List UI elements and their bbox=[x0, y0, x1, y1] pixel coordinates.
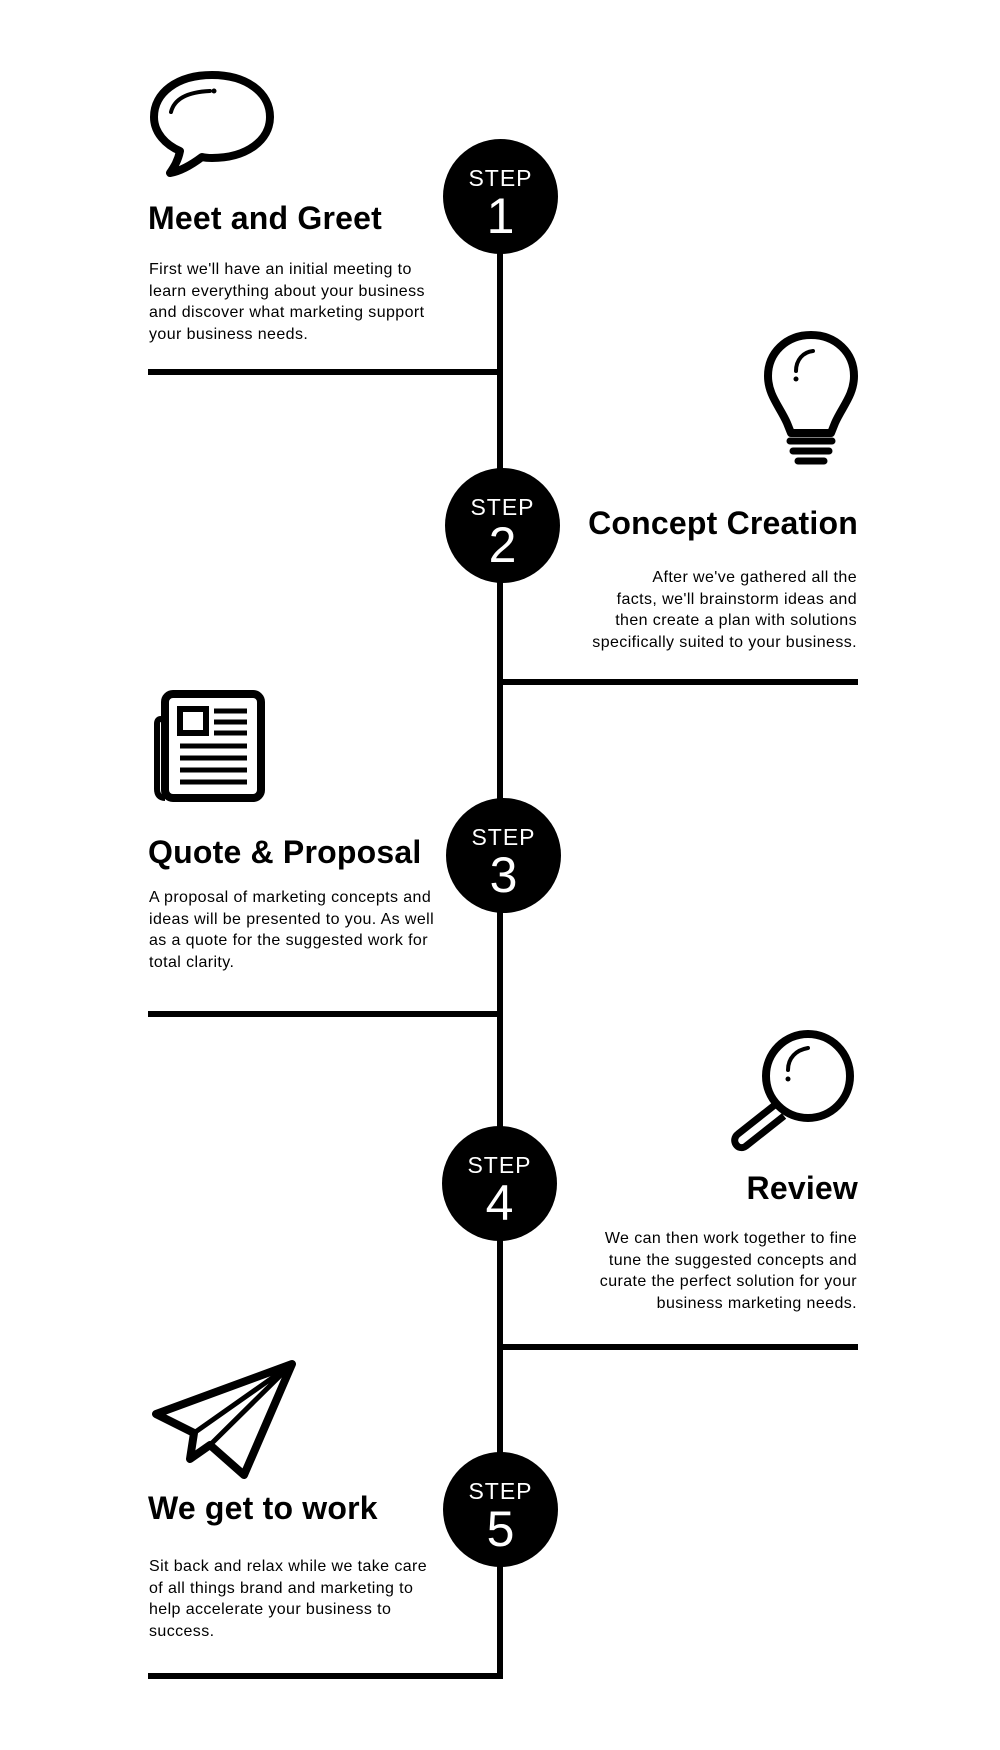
heading: We get to work: We get to work bbox=[148, 1490, 378, 1526]
step 2 circle bbox=[445, 468, 560, 583]
text: step 3 description bbox=[149, 889, 434, 970]
step 3 circle bbox=[446, 798, 561, 913]
text: step 5 description: of all things brand and marketing to bbox=[149, 1580, 413, 1596]
connector line 2 bbox=[497, 679, 858, 685]
text: step 3 description: as a quote for the suggested work for bbox=[149, 932, 428, 949]
heading: Review: Review bbox=[747, 1170, 858, 1206]
step 4 circle: 4 bbox=[486, 1175, 513, 1231]
timeline vertical line bbox=[497, 197, 503, 1679]
icon: paper plane bbox=[152, 1360, 296, 1479]
text: step 5 description: success. bbox=[149, 1622, 214, 1640]
heading: Meet and Greet: Meet and Greet bbox=[148, 200, 382, 236]
text: step 5 description bbox=[149, 1558, 427, 1640]
text: step 4 description: business marketing needs. bbox=[657, 1294, 857, 1312]
text: step 2 description: After we've gathered all the bbox=[652, 569, 857, 586]
step 3 circle: STEP bbox=[471, 824, 536, 850]
connector line 3 bbox=[148, 1011, 503, 1017]
step 1 circle: 1 bbox=[487, 188, 514, 244]
step 4 circle: STEP bbox=[467, 1152, 532, 1178]
text: step 1 description bbox=[149, 261, 425, 342]
text: step 2 description: specifically suited to your business. bbox=[592, 634, 857, 650]
text: step 4 description: tune the suggested concepts and bbox=[609, 1252, 857, 1268]
text: step 3 description: ideas will be presented to you. As well bbox=[149, 910, 434, 928]
step 5 circle: STEP bbox=[468, 1478, 533, 1504]
text: step 5 description: help accelerate your business to bbox=[149, 1601, 391, 1618]
icon: speech bubble bbox=[150, 71, 274, 177]
icon: newspaper bbox=[154, 690, 265, 802]
text: step 4 description: We can then work together to fine bbox=[605, 1230, 857, 1247]
step 4 circle bbox=[442, 1126, 557, 1241]
text: step 3 description: total clarity. bbox=[149, 954, 234, 970]
text: step 3 description: A proposal of marketing concepts and bbox=[149, 889, 431, 906]
text: step 1 description: First we'll have an initial meeting to bbox=[149, 261, 412, 278]
text: step 5 description: Sit back and relax while we take care bbox=[149, 1558, 427, 1575]
connector line 1 bbox=[148, 369, 503, 375]
text: step 2 description bbox=[592, 569, 857, 650]
text: step 1 description: your business needs. bbox=[149, 326, 308, 342]
heading: Quote & Proposal: Quote & Proposal bbox=[148, 834, 421, 870]
icon: magnifying glass bbox=[731, 1030, 854, 1152]
step 5 circle: 5 bbox=[487, 1501, 514, 1557]
step 3 circle: 3 bbox=[490, 847, 517, 903]
text: step 4 description bbox=[600, 1230, 857, 1312]
text: step 1 description: learn everything about your business bbox=[149, 282, 425, 300]
connector line 4 bbox=[497, 1344, 858, 1350]
step 2 circle: STEP bbox=[470, 494, 535, 520]
connector line 5 bbox=[148, 1673, 503, 1679]
text: step 2 description: then create a plan with solutions bbox=[615, 612, 857, 629]
step 1 circle bbox=[443, 139, 558, 254]
text: step 4 description: curate the perfect solution for your bbox=[600, 1273, 857, 1290]
step 1 circle: STEP bbox=[468, 165, 533, 191]
step 5 circle bbox=[443, 1452, 558, 1567]
icon: light bulb bbox=[764, 331, 858, 464]
text: step 1 description: and discover what marketing support bbox=[149, 304, 424, 321]
step 2 circle: 2 bbox=[489, 517, 516, 573]
heading: Concept Creation: Concept Creation bbox=[588, 505, 858, 541]
text: step 2 description: facts, we'll brainstorm ideas and bbox=[617, 590, 857, 608]
